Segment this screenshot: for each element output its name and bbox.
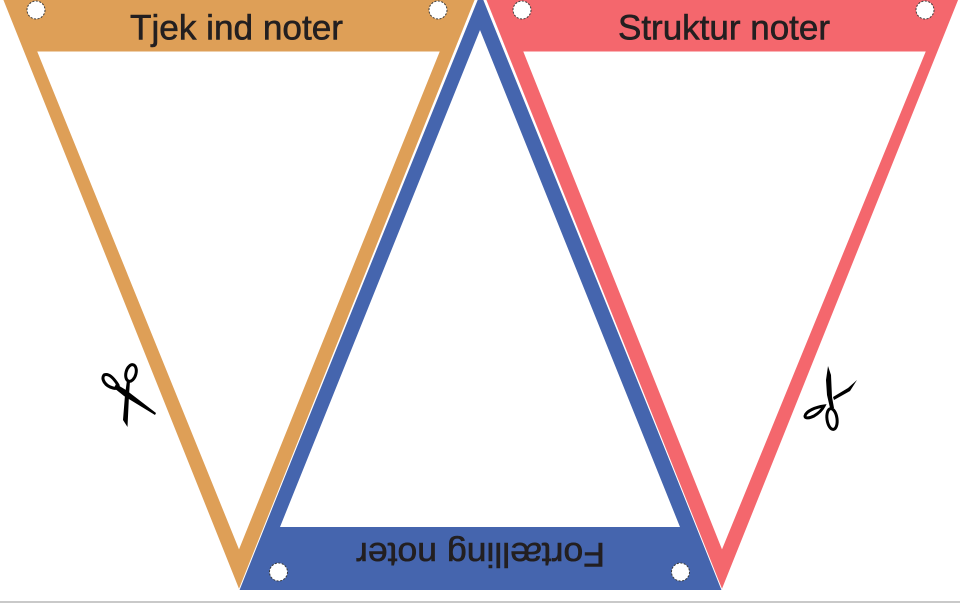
panel: Tjek ind noter pennant: [2, 0, 476, 590]
hole: orange left: [27, 1, 45, 19]
bottom rule: [0, 601, 960, 603]
heading: Fortælling noter: Fortælling noter: [356, 535, 605, 573]
heading: Struktur noter: Struktur noter: [618, 8, 830, 48]
icon: right scissors: [805, 366, 857, 430]
hole: blue left: [270, 563, 288, 581]
icon: left scissors: [103, 363, 156, 427]
hole: red left: [513, 1, 531, 19]
panel: Fortælling noter pennant: [239, 0, 722, 590]
hole: red right: [916, 1, 934, 19]
hole: orange right: [429, 1, 447, 19]
heading: Tjek ind noter: Tjek ind noter: [130, 8, 343, 48]
panel: Struktur noter pennant: [486, 0, 959, 590]
hole: blue right: [672, 563, 690, 581]
